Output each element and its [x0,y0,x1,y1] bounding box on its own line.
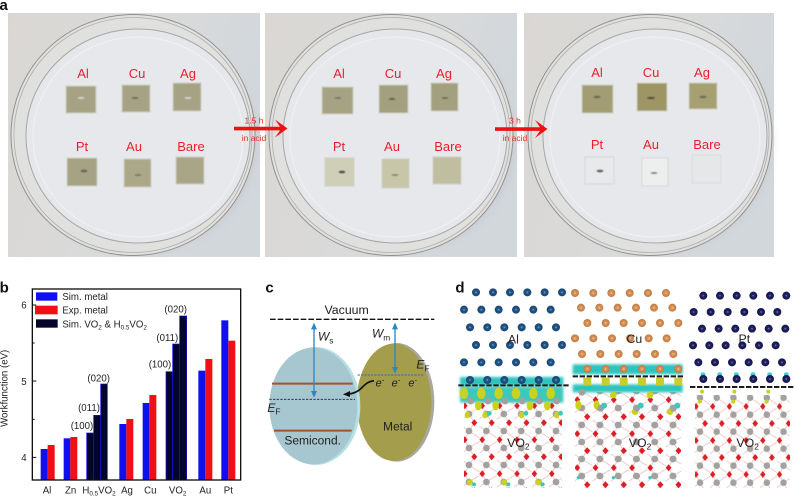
sample labels: Pt [591,137,604,152]
semiconductor ellipse [269,347,360,465]
material labels: Semicond. [284,434,341,448]
symbols: - [398,375,401,384]
legend: & H [102,319,121,330]
symbols: F [424,363,429,373]
Pt atoms [689,292,790,383]
Al atoms [460,288,566,384]
legend: Sim. VO [62,319,98,330]
y axis labels: 6 [21,300,27,311]
symbols: e [408,377,414,389]
structure labels: VO [629,436,647,450]
sample labels: Al [77,66,89,81]
vacuum label: Vacuum [325,303,369,317]
facet labels: (020) [87,374,110,385]
x axis labels: Zn [65,485,76,496]
arrow: 3 h in acid: in acid [503,133,528,143]
facet labels: (020) [164,304,187,315]
electron transfer arrow [343,381,374,397]
symbols: W [318,330,329,344]
structure labels [507,332,759,452]
arrow: 1.5 h in acid: in acid [242,133,267,143]
photo 3: after 3 h [524,13,774,257]
legend: Exp. metal [62,305,108,316]
sample labels: Bare [177,139,205,154]
sample labels: Ag [180,66,196,81]
sample labels: Al [333,66,345,81]
sample labels: Cu [129,66,145,81]
band lines [269,319,434,431]
symbols [267,326,429,417]
bars [41,316,235,480]
facet labels: (100) [71,421,93,432]
structure labels: 2 [754,442,759,452]
legend: VO [129,319,144,330]
photo 2: after 1.5 h [265,13,517,257]
structure labels: Cu [626,332,642,346]
arrow: 3 h in acid: 3 h [509,116,521,126]
metal ellipse [357,343,434,462]
sample labels: Pt [76,139,89,154]
x axis labels: Ag [121,485,133,496]
panel label c: c [265,279,274,296]
x axis labels [43,485,233,497]
facet labels: (100) [149,360,171,371]
y axis labels [0,300,27,464]
x axis labels: H [82,485,89,496]
sample labels: Ag [694,65,710,80]
legend: 2 [98,324,102,331]
sample labels: Ag [436,66,452,81]
material labels [284,420,412,448]
sample labels: Au [643,137,659,152]
symbols: F [275,407,280,417]
panel b: workfunction bar chart [0,280,241,497]
sample labels: Cu [385,66,401,81]
photo 1: before acid [8,13,260,257]
material labels: Metal [383,420,412,434]
interface dashed lines [458,376,795,387]
legend: 2 [143,324,147,331]
panel label d: d [455,279,464,296]
arrow: 3 h in acid [495,116,548,143]
Cu atoms [571,289,682,373]
y axis labels: 5 [21,377,27,388]
charge density: Cu interface [573,364,683,479]
symbols: m [383,332,390,342]
structure labels: 2 [525,442,530,452]
sample labels: Al [591,65,603,80]
structure labels: VO [507,436,525,450]
panel c: band diagram [265,279,434,465]
x axis labels: Cu [144,485,157,496]
sample labels: Bare [434,139,462,154]
sample labels [591,65,721,152]
panel d: atomic structures [455,279,795,488]
sample labels: Au [384,139,400,154]
arrow: 1.5 h in acid [234,116,288,143]
symbols: E [267,401,275,415]
sample labels [76,66,205,154]
facet labels: (011) [78,403,100,414]
axes frame [32,289,241,480]
charge density: Pt interface [698,372,789,404]
x axis labels: VO [98,485,113,496]
arrow: 1.5 h in acid: 1.5 h [245,116,264,126]
legend: Sim. metal [62,292,108,303]
symbols: e [376,377,382,389]
charge density: Al interface [460,377,563,486]
x axis labels: Pt [224,485,233,496]
facet labels: (011) [156,333,178,344]
symbols: - [382,375,385,384]
structure labels: Pt [739,332,751,346]
symbols: W [372,326,383,340]
workfunction arrows [311,323,398,398]
sample labels: Bare [693,137,721,152]
VO2 lattices [464,392,790,488]
structure labels: VO [736,436,754,450]
y axis labels: 4 [21,453,27,464]
sample labels: Au [126,139,142,154]
x axis labels: Au [199,485,211,496]
legend: 0.5 [121,324,130,331]
panel a: etching photographs [0,0,774,257]
facet labels [71,304,187,432]
structure labels: Al [508,333,519,347]
legend [35,292,147,331]
symbols: - [414,375,417,384]
symbols: s [329,336,333,346]
sample labels: Pt [333,139,346,154]
sample labels: Cu [643,65,659,80]
x axis labels: VO [169,485,183,496]
sample labels [333,66,462,154]
symbols: E [416,358,424,372]
symbols: e [392,377,398,389]
structure labels: 2 [647,442,652,452]
x axis labels: Al [43,485,51,496]
